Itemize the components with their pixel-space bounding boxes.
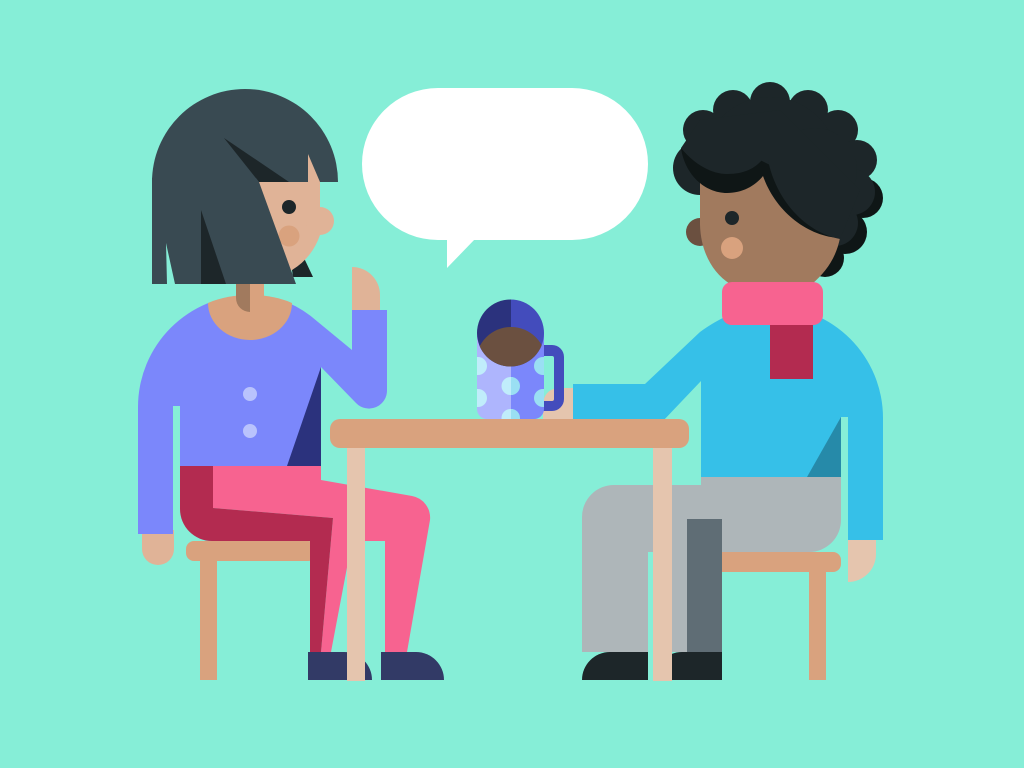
man sweater shadow bbox=[807, 417, 841, 477]
man lower leg bbox=[653, 540, 688, 652]
man fringe shadow bbox=[681, 148, 838, 238]
woman sweater shadow bbox=[287, 367, 321, 466]
woman stool bbox=[186, 541, 316, 680]
table top bbox=[330, 419, 689, 448]
man figure bbox=[543, 82, 883, 680]
man scarf bbox=[722, 282, 823, 379]
woman trousers bbox=[213, 466, 430, 652]
man hand on table bbox=[543, 388, 575, 420]
man sweater bbox=[573, 306, 883, 540]
man ear bbox=[686, 218, 714, 246]
man lower hand bbox=[848, 536, 876, 582]
mug bbox=[477, 300, 564, 419]
man fringe bbox=[681, 110, 860, 239]
woman sweater buttons bbox=[243, 387, 257, 438]
woman near leg shadow bbox=[180, 466, 333, 652]
table legs bbox=[347, 440, 672, 681]
mug body bbox=[477, 334, 544, 419]
woman shoes bbox=[308, 652, 444, 680]
man cheek bbox=[721, 237, 743, 259]
woman hair front bbox=[152, 178, 296, 284]
man face bbox=[700, 168, 840, 284]
man stool bbox=[700, 552, 841, 680]
man hair back curls bbox=[806, 178, 883, 277]
speech bubble bbox=[362, 88, 648, 268]
woman eye bbox=[282, 200, 296, 214]
man near leg shadow bbox=[687, 519, 722, 652]
man trousers bbox=[582, 470, 841, 652]
woman hair back bbox=[152, 89, 338, 277]
mug handle bbox=[543, 345, 564, 411]
woman figure bbox=[138, 89, 444, 680]
illustration: conversation at a table bbox=[138, 82, 883, 681]
woman face bbox=[255, 154, 334, 280]
table bbox=[330, 419, 689, 681]
man eye bbox=[725, 211, 739, 225]
woman sweater bbox=[138, 295, 387, 534]
woman cheek bbox=[278, 226, 300, 246]
man hair curls bbox=[673, 82, 877, 246]
woman neck and collar bbox=[208, 270, 292, 340]
woman raised hand bbox=[352, 267, 380, 312]
man shoes bbox=[582, 652, 722, 680]
woman lower hand bbox=[142, 530, 174, 565]
mug rim and coffee bbox=[477, 300, 544, 366]
